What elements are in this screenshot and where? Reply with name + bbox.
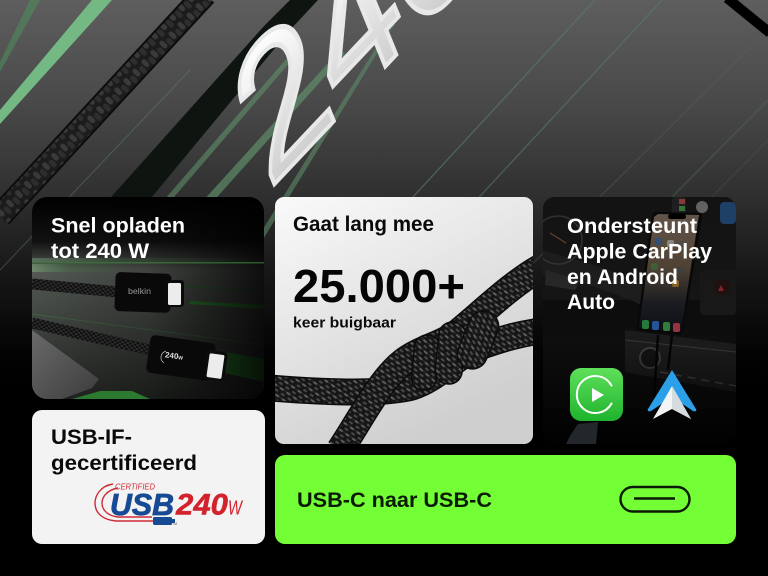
panel: USB-IF certification: [32, 410, 265, 544]
icon: knotted braided cable: [270, 268, 540, 450]
phone on mount: [640, 212, 702, 378]
text: fast charging heading: tot 240 W: [51, 240, 149, 263]
logo: certified USB 240W: 240: [175, 488, 228, 522]
logo: certified USB 240W: W: [228, 498, 244, 520]
text: connector label: USB-C naar USB-C: [297, 489, 492, 512]
text: CarPlay heading: [567, 215, 712, 314]
text: CarPlay heading: Ondersteunt: [567, 215, 697, 238]
panel: USB-IF certification: gecertificeerd: [51, 452, 197, 475]
icon: Android Auto: [648, 370, 696, 419]
panel: USB-C to USB-C: [275, 455, 736, 544]
upper cable and belkin connector: belkin: [128, 287, 151, 296]
logo: certified USB 240W: CERTIFIED: [115, 482, 155, 492]
logo: certified USB 240W: USB: [110, 487, 174, 522]
icon: USB-C port: [620, 487, 690, 512]
logo: certified USB 240W: [95, 482, 244, 526]
text: bend caption: keer buigbaar: [293, 314, 396, 332]
logo: certified USB 240W: TM: [172, 522, 177, 526]
text: fast charging heading: Snel opladen: [51, 214, 185, 238]
panel: USB-IF certification: USB-IF-: [51, 426, 132, 449]
lower cable and 240W connector: 240W: [164, 350, 184, 362]
text: fast charging heading: [51, 214, 185, 263]
stat: 25.000+: 25.000+: [293, 260, 465, 312]
text: CarPlay heading: en Android: [567, 266, 678, 289]
lower cable and 240W connector: [32, 323, 228, 381]
panel: fast charging: [32, 197, 264, 399]
text: durability heading: Gaat lang mee: [293, 213, 434, 236]
panel: CarPlay and Android Auto: [534, 197, 736, 444]
upper cable and belkin connector: [32, 272, 184, 313]
text: CarPlay heading: Auto: [567, 291, 615, 314]
text: CarPlay heading: Apple CarPlay: [567, 240, 712, 264]
panel: durability: [270, 197, 540, 450]
laptop surface: [32, 330, 99, 399]
icon: Apple CarPlay: [570, 368, 623, 421]
